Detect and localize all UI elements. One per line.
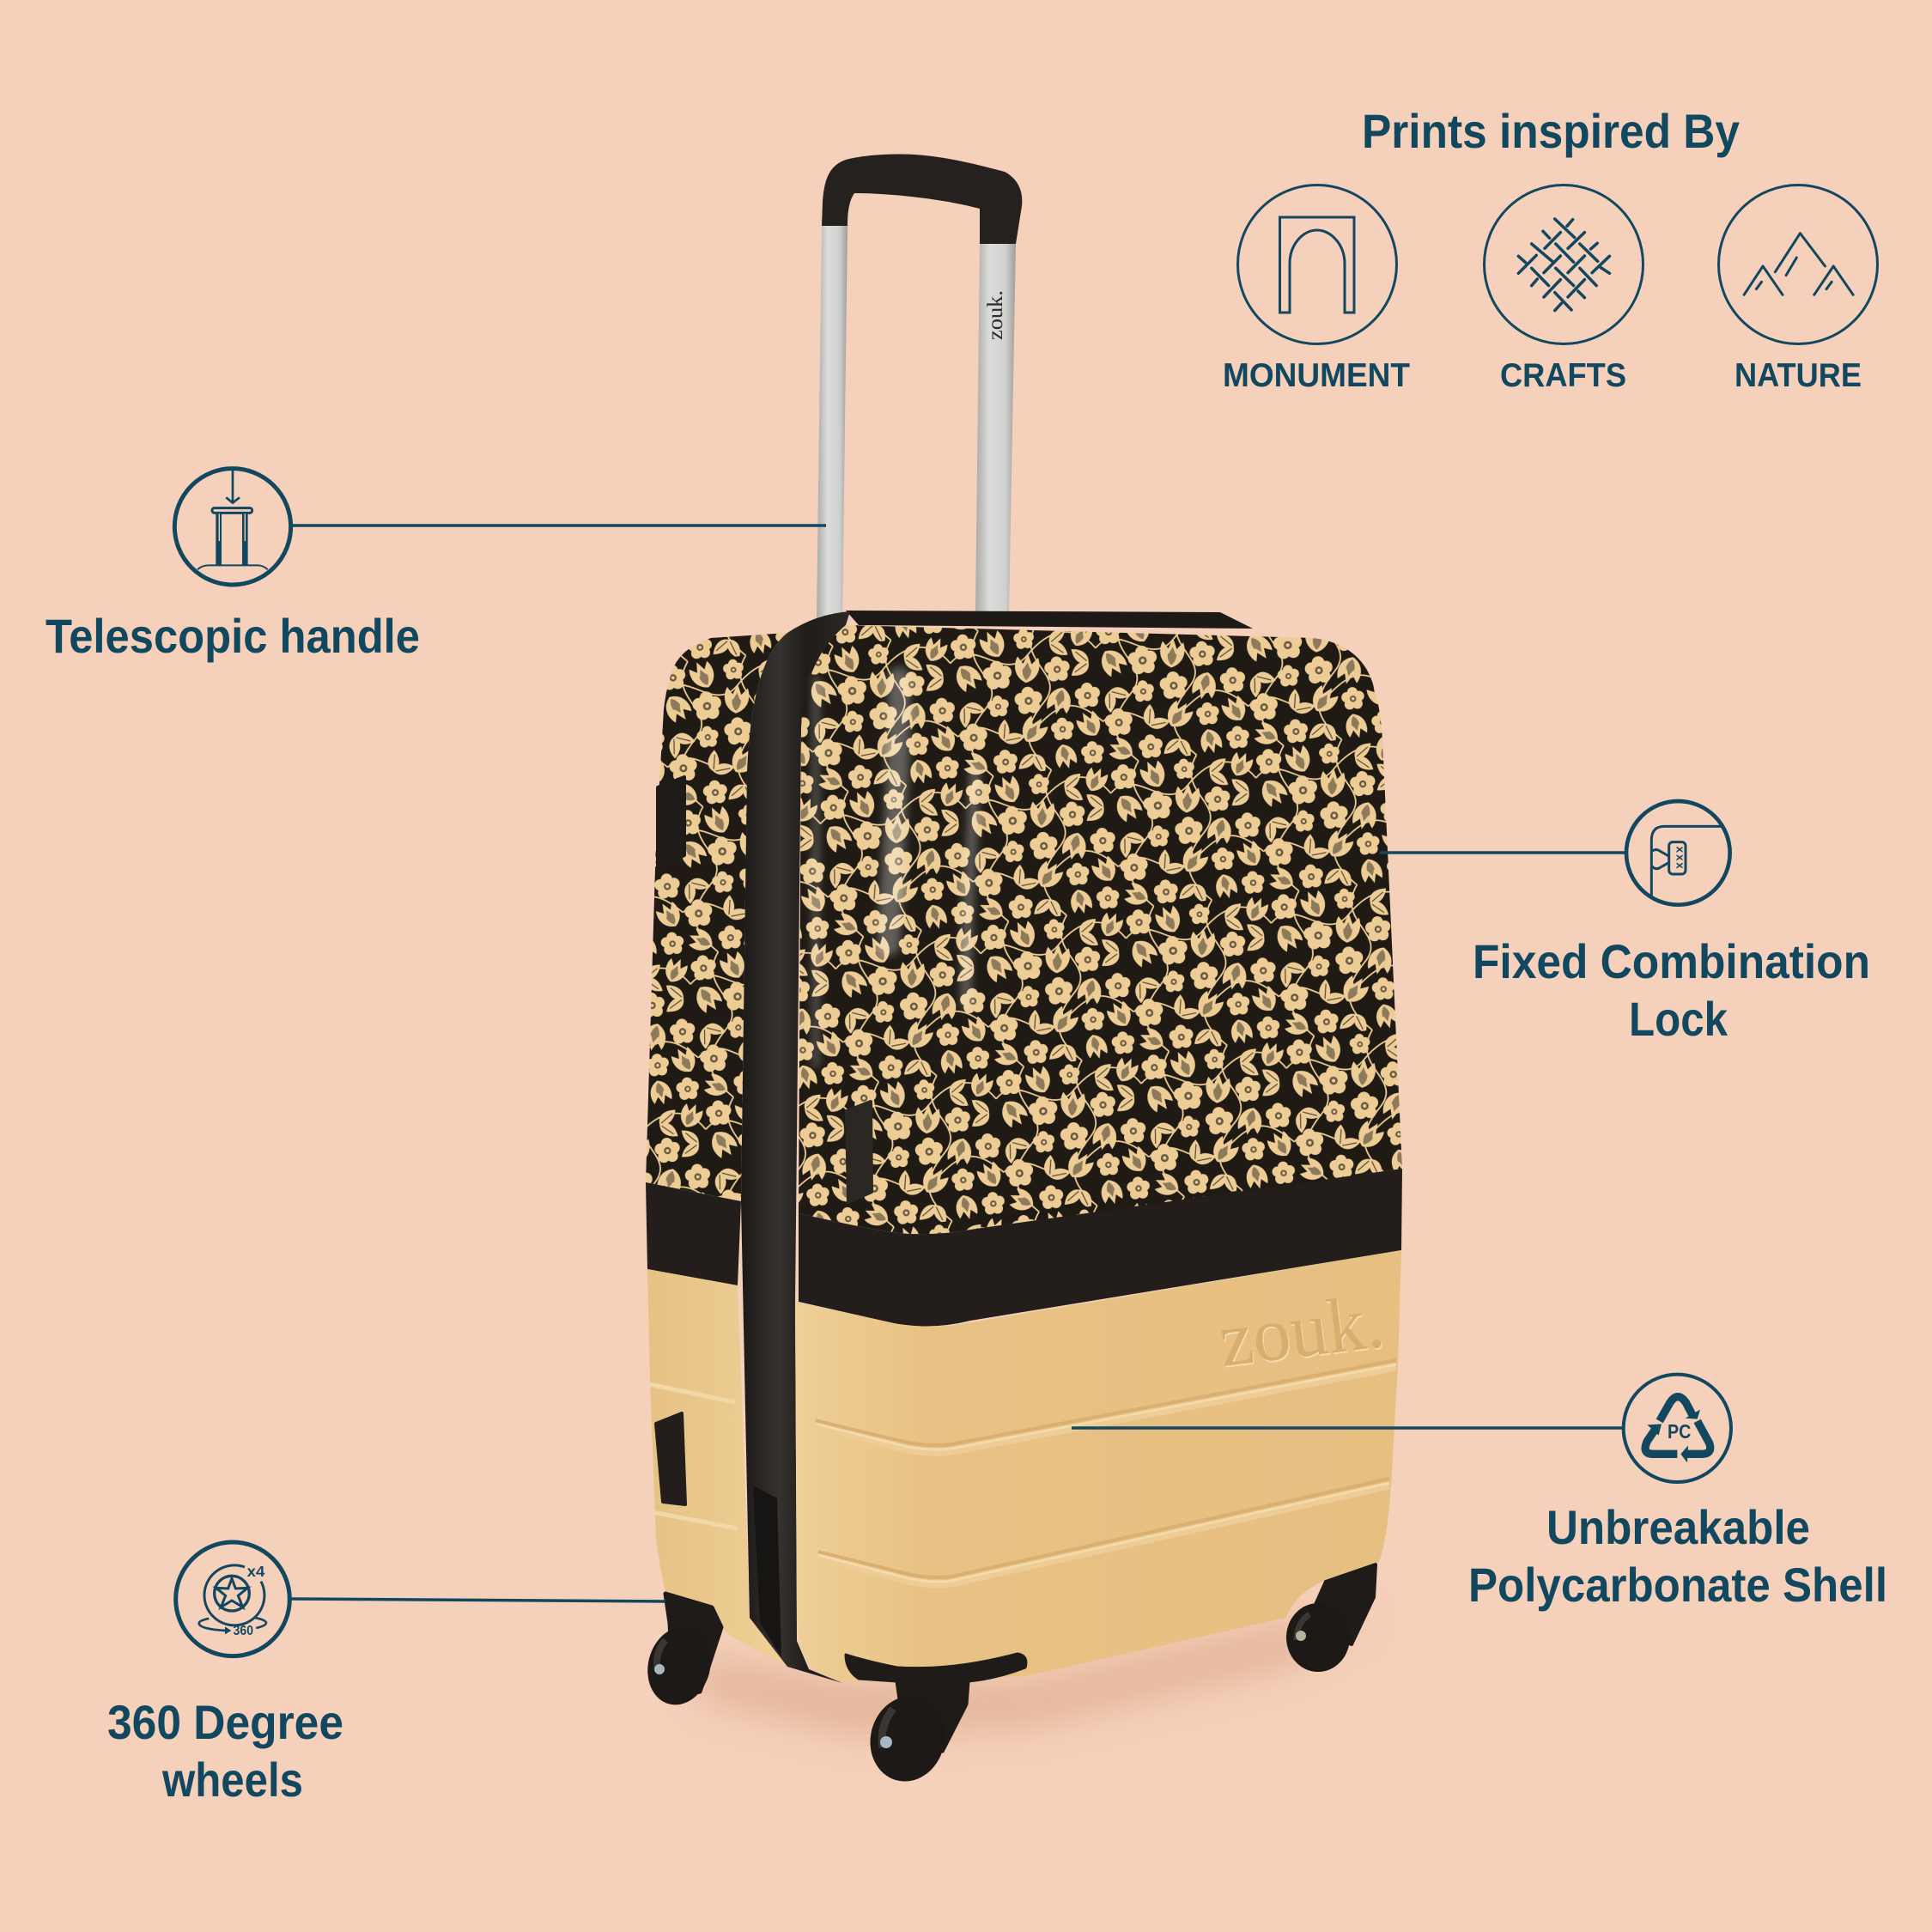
front black band	[799, 1169, 1402, 1327]
icon: recycle PC: PC	[1668, 1420, 1691, 1443]
side tan shell	[647, 1269, 787, 1667]
icon: combination lock	[1626, 801, 1730, 905]
callout: polycarbonate shell	[1072, 1375, 1887, 1612]
leader line: shell	[1072, 1426, 1625, 1430]
label: polycarbonate shell: Polycarbonate Shell	[1468, 1558, 1887, 1612]
left wheel	[639, 1594, 721, 1712]
label: 360 degree wheels: 360 Degree	[107, 1695, 343, 1749]
top zipper edge	[846, 611, 1253, 629]
icon: wheel: 360	[234, 1624, 253, 1638]
label: fixed combination lock: Fixed Combination	[1473, 934, 1870, 988]
front print panel	[799, 625, 1402, 1234]
zipper channel	[741, 611, 850, 1683]
label: monument: MONUMENT	[1223, 357, 1410, 394]
label: crafts: CRAFTS	[1500, 357, 1626, 394]
side ribs	[649, 1384, 738, 1528]
icon: crafts	[1484, 185, 1643, 343]
icon: combination lock: xxx	[1674, 847, 1686, 869]
front wheel	[846, 1654, 1026, 1789]
gloss highlights	[816, 678, 975, 1065]
side black band	[646, 1182, 741, 1285]
icon: wheel	[176, 1542, 289, 1656]
icon: telescopic handle	[174, 469, 291, 585]
side panel print	[646, 633, 787, 1201]
right wheel	[1286, 1564, 1376, 1672]
leader line: handle	[290, 524, 826, 527]
callout: 360 degree wheels	[107, 1542, 665, 1807]
embossed logo: zouk.	[1214, 1279, 1388, 1383]
label: 360 degree wheels: wheels	[161, 1753, 303, 1807]
handle logo: zouk.	[984, 290, 1007, 340]
label: nature: NATURE	[1735, 357, 1862, 394]
suitcase	[639, 154, 1402, 1789]
floor shadow	[687, 1614, 1374, 1735]
upper side handle	[658, 777, 684, 869]
callout: telescopic handle	[46, 469, 826, 663]
front clip	[847, 1102, 872, 1202]
zipper mesh strip	[753, 1485, 781, 1657]
icon: wheel: x4	[247, 1563, 264, 1580]
leader line: lock	[1380, 851, 1626, 854]
leader line: wheels	[290, 1599, 665, 1601]
shell ribs	[816, 1360, 1396, 1585]
front tan shell	[795, 1250, 1401, 1681]
icon: nature	[1719, 185, 1877, 343]
label: fixed combination lock: Lock	[1629, 992, 1728, 1046]
label: telescopic handle: Telescopic handle	[46, 609, 420, 663]
callout: fixed combination lock	[1380, 801, 1870, 1046]
lower side handle	[656, 1413, 685, 1504]
icon: monument	[1238, 185, 1396, 343]
icon: recycle PC	[1624, 1375, 1731, 1482]
label: polycarbonate shell	[1468, 1500, 1887, 1612]
label: fixed combination lock	[1473, 934, 1870, 1046]
label: polycarbonate shell: Unbreakable	[1546, 1500, 1810, 1554]
embossed logo: zouk.	[1216, 1280, 1389, 1385]
label: 360 degree wheels	[107, 1695, 343, 1807]
telescopic handle	[817, 154, 1022, 623]
heading: prints inspired by: Prints inspired By	[1362, 104, 1740, 158]
